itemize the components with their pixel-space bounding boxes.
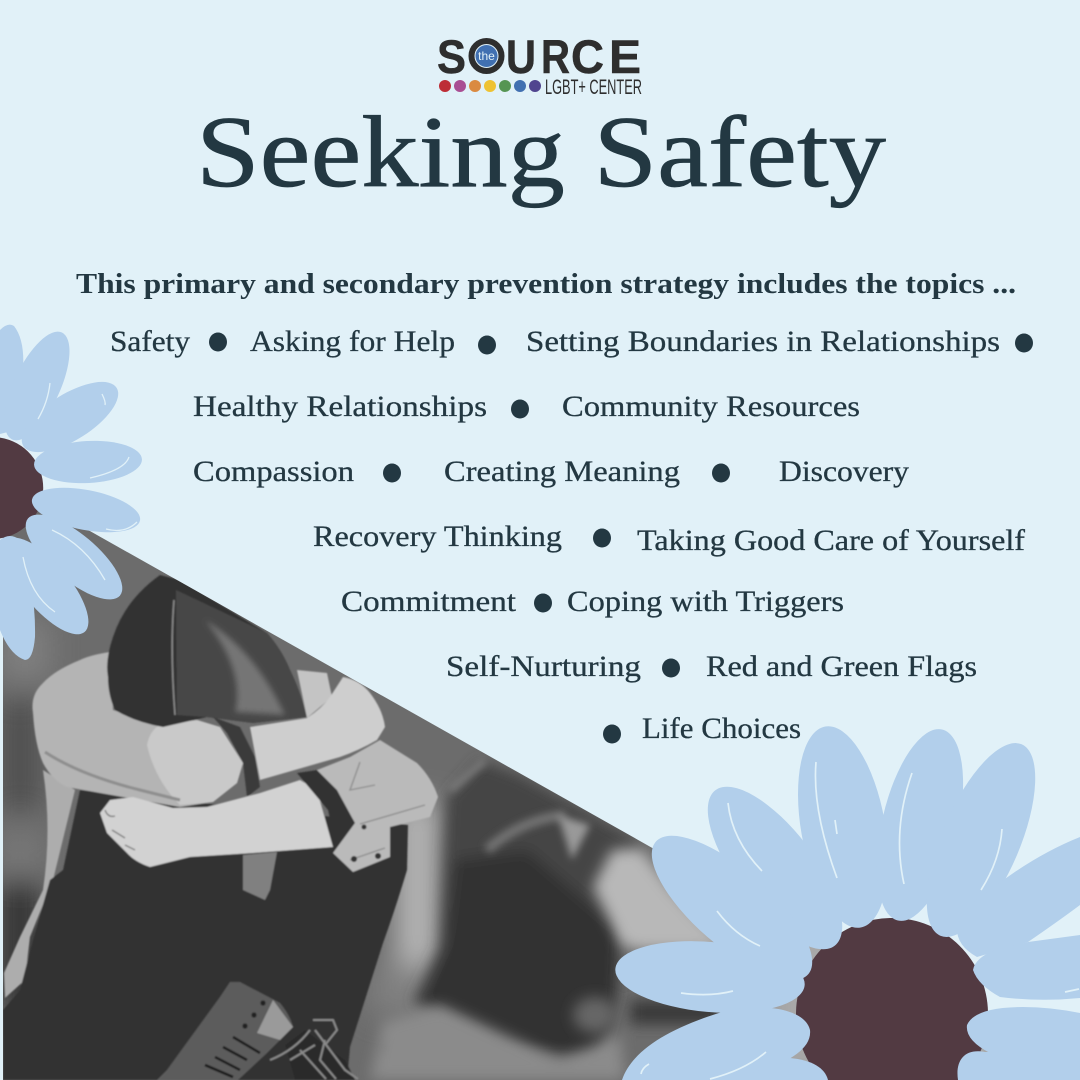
topic row 1: Setting Boundaries in Relationships xyxy=(526,325,1000,358)
topic row 1 xyxy=(110,325,1033,358)
boot xyxy=(157,982,293,1080)
petal highlights xyxy=(641,762,1079,1079)
wristband one xyxy=(213,717,260,797)
topic row 3: Discovery xyxy=(779,455,909,488)
topic row 1: Asking for Help xyxy=(250,325,455,358)
flower: top left xyxy=(0,323,144,660)
topic row 5: Coping with Triggers xyxy=(567,585,844,618)
flower: bottom right xyxy=(612,719,1080,1080)
rainbow dots xyxy=(439,80,541,92)
topic row 3: Compassion xyxy=(193,455,354,488)
topic row 2: Healthy Relationships xyxy=(193,390,487,423)
topics list xyxy=(110,325,1033,745)
topic row 5: Commitment xyxy=(341,585,517,618)
topic row 1: Safety xyxy=(110,325,190,358)
photo: person hugging knees, grayscale, cut on a diagonal xyxy=(3,511,988,1080)
petals xyxy=(0,323,144,660)
lower arm and hand xyxy=(100,780,333,867)
topic row 6 xyxy=(446,650,977,683)
flower centre xyxy=(796,918,988,1080)
topic row 6: Red and Green Flags xyxy=(706,650,977,683)
topic row 2 xyxy=(193,390,860,423)
logo wordmark letters: R xyxy=(541,30,570,83)
topic row 4: Recovery Thinking xyxy=(313,520,562,553)
topic row 7: Life Choices xyxy=(642,712,801,745)
person xyxy=(3,575,438,1080)
sleeve cuff xyxy=(317,740,438,872)
logo subtitle: LGBT+ CENTER xyxy=(545,76,642,99)
blurred figure in background xyxy=(413,760,640,1060)
logo wordmark letters: C xyxy=(571,30,604,83)
petals xyxy=(612,719,1080,1080)
pants xyxy=(3,790,408,1080)
upper forearm xyxy=(250,677,385,780)
topic row 6: Self-Nurturing xyxy=(446,650,641,683)
topic row 5 xyxy=(341,585,844,618)
topic row 2: Community Resources xyxy=(562,390,860,423)
topic row 4 xyxy=(313,520,1025,557)
logo wordmark letters: E xyxy=(609,30,641,83)
hair xyxy=(106,574,265,728)
logo wordmark letters xyxy=(437,30,641,83)
title: Seeking Safety xyxy=(196,96,886,209)
intro sentence: This primary and secondary prevention strategy includes the topics ... xyxy=(76,268,1016,300)
sleeve behind head xyxy=(297,670,332,718)
blurred hand in background xyxy=(593,848,732,950)
topic row 3 xyxy=(193,455,909,488)
wristband two xyxy=(297,770,352,820)
topic row 4: Taking Good Care of Yourself xyxy=(637,524,1025,557)
flower centre xyxy=(0,438,43,538)
hair tail xyxy=(243,852,277,900)
logo circle with "the": the xyxy=(478,49,495,63)
shirt strip on the left xyxy=(4,770,75,998)
logo wordmark letters: S xyxy=(437,30,466,83)
topic row 3: Creating Meaning xyxy=(444,455,680,488)
petal highlights xyxy=(23,383,137,612)
logo circle with "the" xyxy=(472,41,502,71)
logo wordmark letters: U xyxy=(506,30,536,83)
logo: The Source LGBT+ Center xyxy=(437,30,642,99)
shirt back and upper arm xyxy=(32,652,209,808)
